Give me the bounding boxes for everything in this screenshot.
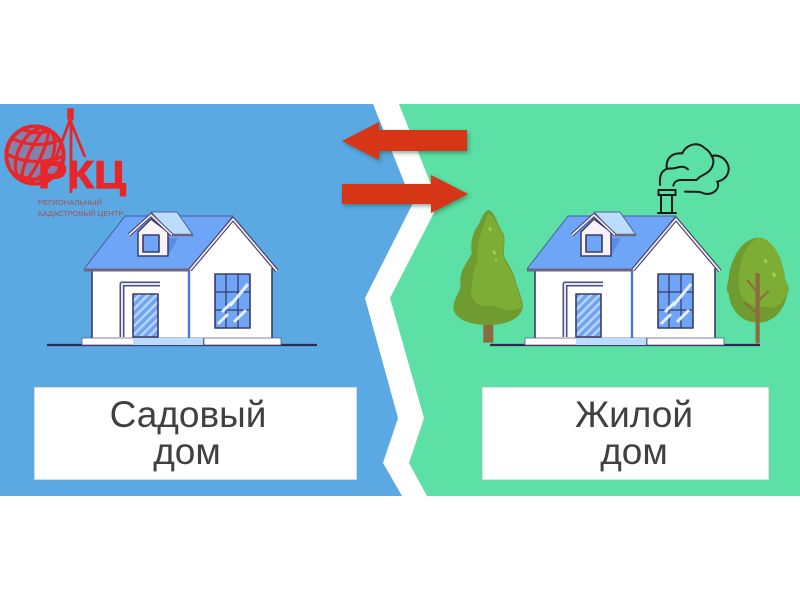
icon: residential house (490, 212, 760, 345)
label: garden house: Садовый (110, 394, 266, 435)
icon: surveying tripod (55, 109, 85, 193)
logo: regional cadastral centre (0, 109, 127, 218)
logo subtitle: РЕГИОНАЛЬНЫЙ (38, 198, 102, 207)
icon: chimney with smoke (658, 144, 729, 213)
icon: globe (0, 117, 73, 193)
icon: right round tree (727, 238, 789, 343)
label: garden house (34, 387, 357, 480)
logo subtitle: КАДАСТРОВЫЙ ЦЕНТР (38, 209, 124, 218)
label: residential house: Жилой (575, 394, 693, 435)
panel: green background (390, 104, 800, 496)
label: residential house: дом (600, 431, 668, 472)
arrow: pointing right (342, 175, 468, 213)
icon: garden house (47, 212, 317, 345)
panel: blue background (0, 104, 413, 496)
label: garden house: дом (153, 431, 221, 472)
icon: left conifer tree (453, 210, 523, 343)
label: residential house (482, 387, 769, 480)
arrow: pointing left (342, 122, 467, 160)
logo letters: РКЦ (38, 154, 127, 197)
